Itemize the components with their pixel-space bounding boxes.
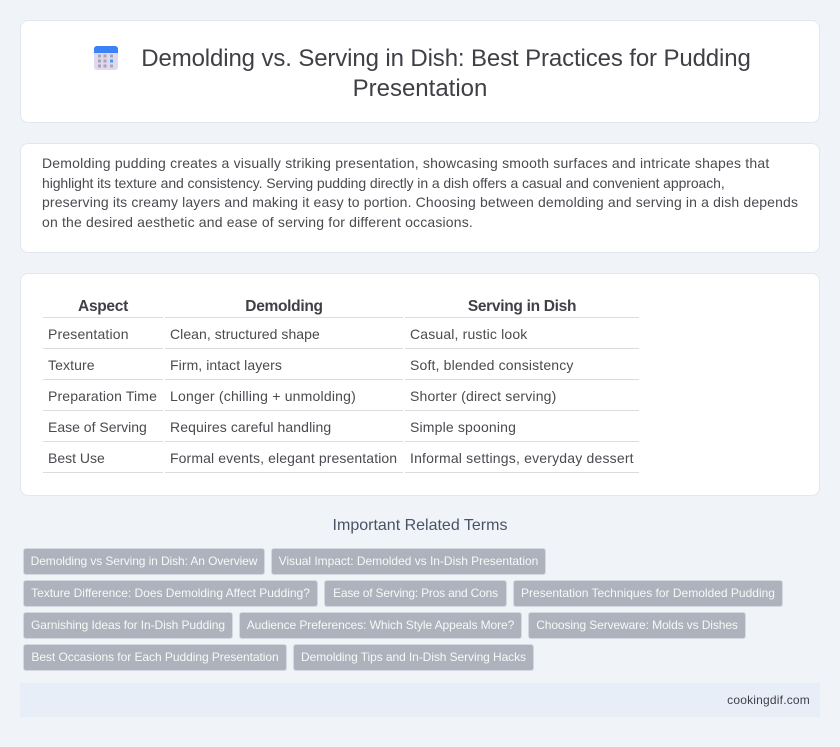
row: presentation: Presentation <box>48 326 129 342</box>
row: ease of serving: Requires careful handling <box>170 419 331 435</box>
row: texture: Texture <box>48 357 95 373</box>
row: preparation time <box>48 388 556 404</box>
row: preparation time: Preparation Time <box>48 388 157 404</box>
row: ease of serving: Simple spooning <box>410 419 516 435</box>
tag: Demolding Tips and In-Dish Serving Hacks <box>301 650 526 664</box>
row: best use: Best Use <box>48 450 105 466</box>
tag: Visual Impact: Demolded vs In-Dish Presentation <box>279 554 538 568</box>
tag <box>23 612 233 639</box>
row: texture <box>48 357 574 373</box>
row: ease of serving: Ease of Serving <box>48 419 147 435</box>
intro paragraph <box>42 155 798 230</box>
row: presentation <box>48 326 528 342</box>
tag <box>513 580 783 607</box>
table header: Aspect <box>78 298 128 315</box>
intro paragraph: Demolding pudding creates a visually striking presentation, showcasing smooth surfaces and intricate shapes that <box>42 155 769 171</box>
related terms heading: Important Related Terms <box>333 517 507 534</box>
row: presentation: Clean, structured shape <box>170 326 320 342</box>
intro paragraph: highlight its texture and consistency. Serving pudding directly in a dish offers a casual and convenient approach, <box>42 174 725 190</box>
tag <box>271 548 546 575</box>
footer credit: cookingdif.com <box>727 693 810 707</box>
intro text panel <box>20 143 820 253</box>
tag: Choosing Serveware: Molds vs Dishes <box>536 618 738 632</box>
tag <box>23 548 265 575</box>
comparison table <box>43 298 639 473</box>
comparison table panel <box>20 273 820 496</box>
tag: Texture Difference: Does Demolding Affect Pudding? <box>31 586 310 600</box>
tag: Garnishing Ideas for In-Dish Pudding <box>31 618 225 632</box>
intro paragraph: on the desired aesthetic and ease of serving for different occasions. <box>42 214 473 230</box>
row: ease of serving <box>48 419 516 435</box>
tag <box>23 644 287 671</box>
row: best use <box>48 450 634 466</box>
icon: calendar <box>94 46 118 70</box>
tag <box>293 644 534 671</box>
row: texture: Soft, blended consistency <box>410 357 574 373</box>
tag: Audience Preferences: Which Style Appeals More? <box>247 618 514 632</box>
row: preparation time: Shorter (direct serving) <box>410 388 556 404</box>
related terms tags <box>23 548 783 671</box>
table header <box>78 298 576 315</box>
row: presentation: Casual, rustic look <box>410 326 527 342</box>
tag: Best Occasions for Each Pudding Presentation <box>31 650 279 664</box>
table header: Serving in Dish <box>468 298 576 315</box>
table header: Demolding <box>245 298 323 315</box>
tag: Ease of Serving: Pros and Cons <box>333 586 498 600</box>
title: Demolding vs. Serving in Dish: Best Practices for Pudding <box>141 45 751 72</box>
tag <box>239 612 522 639</box>
row: best use: Informal settings, everyday dessert <box>410 450 634 466</box>
footer bar <box>20 683 820 717</box>
tag <box>324 580 507 607</box>
tag: Demolding vs Serving in Dish: An Overview <box>31 554 257 568</box>
row: best use: Formal events, elegant presentation <box>170 450 397 466</box>
title: Presentation <box>353 74 487 102</box>
tag: Presentation Techniques for Demolded Pudding <box>521 586 775 600</box>
header panel <box>20 20 820 123</box>
tag <box>23 580 318 607</box>
intro paragraph: preserving its creamy layers and making it easy to portion. Choosing between demolding and serving in a dish depends <box>42 194 798 210</box>
row: texture: Firm, intact layers <box>170 357 282 373</box>
row: preparation time: Longer (chilling + unmolding) <box>170 388 356 404</box>
title <box>141 45 751 102</box>
tag <box>528 612 746 639</box>
